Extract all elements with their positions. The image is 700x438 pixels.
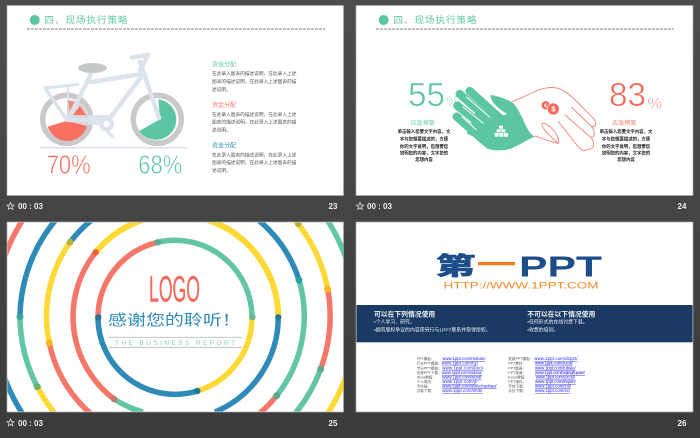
link list: right column: www.1ppt.com/beijing/tupian/ (535, 370, 586, 375)
link list: left column: 个人简历： (417, 379, 435, 384)
link list: left column (417, 356, 497, 393)
text block: allocation 1: 在此录入图表的描述说明，在此录入上述 (212, 70, 297, 77)
link list: left column: www.1ppt.com/hy/ (442, 361, 479, 366)
link list: left column: www.1ppt.com/xiazai/ (442, 370, 482, 375)
panel: slide 24 hands (356, 6, 693, 196)
link list: left column: www.1ppt.com/jl/ (442, 379, 478, 384)
ring 4 (20, 218, 330, 416)
panel: slide 26 brand page (356, 222, 693, 412)
stat: 55%: % (446, 93, 460, 110)
allowed uses: •个人学习、研究。 (374, 318, 415, 326)
text block: allocation 3: 资金分配 (212, 142, 236, 150)
ring 2 (73, 215, 278, 412)
footer: slide 24 timing: 00 : 03 (367, 202, 392, 211)
footer: slide 24 timing: 24 (678, 202, 687, 211)
link list: right column: 手抄下载： (508, 388, 526, 393)
link list: left column: 节日PPT模板： (417, 365, 442, 370)
text block: allocation 3 (212, 142, 297, 174)
text block: right plan (600, 119, 653, 163)
link list: right column: PPT图表： (508, 365, 526, 370)
link list: right column: PPT课件： (508, 379, 526, 384)
front wheel pie chart (139, 99, 176, 140)
stat: 70%: 70% (47, 152, 91, 180)
text block: allocation 1: 资金分配 (212, 60, 236, 68)
prohibited uses: •任何形式的在线付费下载。 (527, 318, 588, 326)
ring 1 (98, 240, 252, 394)
icon: coins: $ (551, 105, 556, 114)
panel: slide 25 thanks with rings: LOGO (149, 268, 200, 310)
link list: right column: www.1ppt.com/excel/ (536, 375, 576, 380)
allowed uses (374, 310, 491, 334)
brand logo (436, 252, 602, 284)
link list: left column: www.1ppt.com/shouchaobao/ (442, 383, 497, 388)
text block: allocation 1 (212, 60, 297, 93)
stat: 83%: 83 (609, 77, 646, 114)
text block: right plan: 说明您的内容，文字您的 (602, 150, 651, 156)
text block: allocation 1: 图表的描述说明，在此录入上述图表的描 (212, 78, 297, 85)
text block: left plan: 你的文字说明，您想要您 (400, 143, 449, 150)
text block: allocation 2: 在此录入图表的描述说明，在此录入上述 (212, 111, 297, 118)
text block: right plan: 应急预案 (612, 119, 636, 127)
link list: right column: www.1ppt.com/ziti/ (535, 383, 572, 388)
link list: right column: www.1ppt.com/kejian/ (535, 379, 576, 384)
link list: left column: PPT模板： (417, 356, 434, 361)
link list: left column: 优秀PPT下载： (417, 370, 442, 375)
text block: left plan: 您想内容 (415, 156, 433, 163)
footer: slide 23 timing: 00 : 03 (18, 202, 43, 211)
text block: right plan: 单击输入您要文字内容，文 (600, 128, 653, 135)
text block: allocation 3: 在此录入图表的描述说明，在此录入上述 (212, 152, 297, 158)
ring 3 (46, 218, 304, 416)
text block: right plan: 字与您想要描述的，方便 (602, 136, 651, 142)
text block: left plan: 说明您的内容，文字您的 (400, 150, 449, 156)
link list: right column: www.1ppt.com/dzppt/ (534, 356, 578, 361)
brand logo: PPT (519, 252, 602, 284)
subtitle with rules (108, 337, 242, 347)
link list: left column: 试卷下载： (417, 388, 435, 393)
prohibited uses: •收费的培训。 (527, 326, 558, 334)
text block: left plan: 单击输入您要文字内容，文 (398, 128, 451, 135)
footer: slide 23 timing (7, 202, 338, 211)
icon: coins (541, 101, 559, 115)
footer: slide 23 timing: 23 (328, 202, 338, 211)
link list: right column: www.1ppt.com/sucai/ (535, 361, 573, 366)
text block: allocation 3: 述说明。 (212, 167, 231, 174)
rear wheel pie chart (48, 100, 89, 141)
heading: slide 24: 四、现场执行策略 (394, 14, 478, 26)
stat: 83%: % (648, 95, 662, 113)
text block: allocation 3: 图表的描述说明，在此录入上述图表的描 (212, 159, 297, 166)
concentric coloured rings (3, 215, 347, 416)
prohibited uses (527, 310, 595, 334)
prohibited uses: 不可以在以下情况使用 (527, 310, 595, 318)
link list: right column: www.1ppt.com/tubiao/ (535, 365, 576, 370)
link list: left column: Word教程： (417, 375, 436, 380)
illustration: red outline hand (513, 87, 596, 150)
link list: left column: www.1ppt.com/moban/ (442, 356, 486, 361)
heading: slide 23 (27, 14, 325, 29)
link list: left column: www.1ppt.com/jieri/ (442, 365, 484, 370)
stat: 55%: 55 (408, 77, 445, 114)
brand URL: HTTP://WWW.1PPT.COM (444, 280, 598, 290)
link list: left column: www.1ppt.com/word/ (442, 375, 482, 380)
brand logo: 第 (436, 253, 476, 280)
link list: left column: 手抄报： (417, 383, 431, 388)
illustration: green hand (457, 91, 535, 150)
icon: gold bars (495, 126, 508, 137)
footer: slide 25 timing: 00 : 03 (18, 419, 43, 428)
footer: slide 25 timing: 25 (328, 419, 338, 428)
text block: allocation 2 (212, 101, 297, 134)
text block: allocation 2: 图表的描述说明，在此录入上述图表的描 (212, 118, 297, 126)
stat: 68%: 68% (138, 152, 182, 180)
text block: allocation 1: 述说明。 (212, 86, 231, 93)
footer: slide 25 timing (7, 419, 338, 428)
stat: 83% (609, 77, 662, 114)
subtitle with rules: THE BUSINESS REPORT (115, 340, 235, 347)
footer: slide 24 timing (356, 202, 687, 211)
text block: left plan: 应急预案 (411, 119, 435, 127)
text block: left plan: 字与您想要描述的，方便 (400, 136, 449, 142)
text block: allocation 2: 述说明。 (212, 126, 231, 134)
link list: left column: www.1ppt.com/shiti/ (442, 388, 483, 393)
heading: slide 24 (376, 14, 674, 29)
footer: slide 26 number: 26 (678, 419, 687, 428)
link list: right column: Excel教程： (508, 375, 528, 380)
bicycle illustration (40, 55, 188, 148)
allowed uses: 可以在下列情况使用 (374, 310, 435, 318)
link list: right column: PPT背景： (508, 370, 526, 375)
panel: slide 25 thanks with rings (3, 215, 347, 416)
thank-you heading: 感谢您的聆听！ (108, 312, 241, 328)
ring 5 (3, 218, 347, 416)
link list: right column (508, 356, 586, 393)
link list: right column: 党政PPT模板： (508, 356, 533, 361)
text block: right plan: 您想内容 (617, 156, 635, 163)
text block: right plan: 你的文字说明，您想要您 (602, 143, 651, 150)
band: usage terms (356, 305, 692, 342)
ring joint dots (16, 221, 331, 402)
link list: right column: 字体下载： (508, 383, 526, 388)
saddle (78, 63, 107, 73)
icon: coins: € (544, 103, 548, 109)
text block: left plan (398, 119, 451, 163)
allowed uses: •拥有版权争议的内容需另行与1PPT联系并取得授权。 (374, 326, 491, 334)
heading: slide 23: 四、现场执行策略 (44, 14, 129, 26)
link list: right column: PPT素材： (508, 361, 526, 366)
text block: allocation 2: 资金分配 (212, 101, 236, 109)
panel: slide 23 bicycle (7, 6, 344, 196)
link list: right column: www.1ppt.com/sc/ (535, 388, 571, 393)
link list: left column: 行业PPT模板： (417, 361, 442, 366)
